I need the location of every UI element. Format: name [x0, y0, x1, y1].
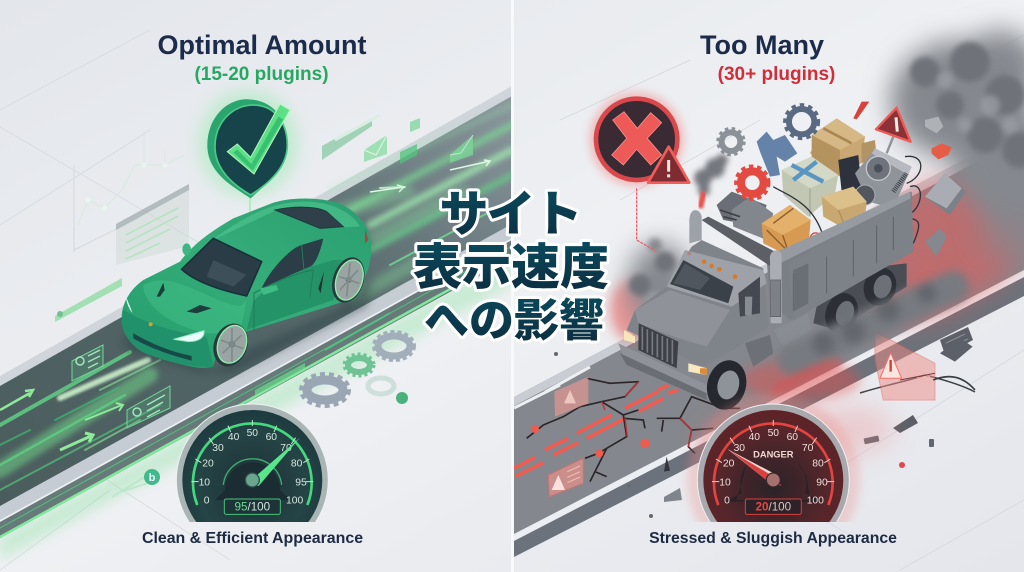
- x badge: [589, 92, 689, 251]
- green speedometer: 60: [266, 432, 277, 443]
- red speedometer: 60: [787, 432, 798, 443]
- green speedometer: 70: [280, 443, 292, 454]
- red speedometer: 20: [723, 459, 735, 470]
- truck: [618, 102, 975, 414]
- red speedometer: 70: [802, 443, 814, 454]
- front wheel: [706, 360, 746, 410]
- red speedometer: [687, 393, 860, 567]
- gears: [301, 332, 414, 406]
- caption: clean and efficient: Clean & Efficient Appearance: [142, 530, 363, 547]
- warning window: [875, 332, 935, 400]
- exhaust ember: [700, 192, 704, 208]
- center divider: [511, 0, 514, 572]
- center title: への影響: [424, 295, 604, 346]
- cracks: [527, 378, 740, 482]
- road: fast lane: [0, 86, 512, 560]
- exhaust smoke: [694, 154, 728, 196]
- green speedometer: 0: [204, 495, 210, 506]
- scattered debris: [554, 327, 975, 518]
- green speedometer: 50: [247, 428, 258, 439]
- red speedometer: 100: [807, 495, 824, 506]
- low smoke trail: [793, 283, 953, 360]
- road panels: [72, 345, 170, 428]
- red speedometer: 10: [719, 477, 731, 488]
- floating interface cards: [55, 115, 473, 322]
- green speedometer: 40: [228, 432, 240, 443]
- windows: [182, 238, 262, 296]
- red speedometer: 20/100: [755, 501, 792, 514]
- green gauge glow chip: [112, 469, 160, 497]
- red speedometer: 0: [724, 495, 730, 506]
- center title: 表示速度: [413, 241, 609, 295]
- wheels rear: [813, 263, 907, 338]
- warning sign: [876, 108, 911, 153]
- panel: too many: [514, 30, 1024, 570]
- gears and puzzle: [718, 105, 818, 199]
- title: optimal amount: Optimal Amount: [158, 30, 366, 60]
- cab: [618, 210, 782, 410]
- smoke clouds: [628, 30, 1024, 327]
- car body: [122, 199, 371, 368]
- green speedometer: [176, 404, 328, 522]
- red lane marks: [514, 385, 678, 477]
- warning plates: [554, 377, 588, 417]
- red speedometer: 50: [768, 428, 779, 439]
- subtitle: 15-20 plugins: (15-20 plugins): [194, 64, 329, 85]
- red speedometer: 30: [734, 443, 745, 454]
- green gauge glow chip: b: [149, 472, 156, 484]
- cargo: [716, 102, 966, 256]
- red speedometer: 90: [816, 477, 828, 488]
- arrows on road: [0, 160, 490, 450]
- wires: [773, 156, 922, 244]
- dump bed: [767, 192, 914, 320]
- center title: [413, 188, 609, 346]
- red speedometer: 80: [812, 459, 824, 470]
- green speedometer: 100: [286, 495, 304, 506]
- red speedometer: DANGER: [753, 450, 794, 460]
- center title: サイト: [439, 188, 581, 242]
- cracked road: [514, 128, 1024, 557]
- green speedometer: 95: [295, 477, 307, 488]
- red speedometer: 40: [749, 432, 760, 443]
- red glow: [610, 180, 1020, 470]
- green speedometer: 95/100: [234, 501, 271, 514]
- vents and lights: [157, 283, 165, 297]
- subtitle: 30+ plugins: (30+ plugins): [718, 64, 835, 85]
- title: too many: Too Many: [700, 30, 824, 60]
- green speedometer: 30: [212, 443, 224, 454]
- green speedometer: 10: [199, 477, 210, 488]
- wheels: [213, 324, 248, 366]
- panel: optimal amount: [0, 30, 512, 570]
- check pin: [198, 90, 298, 243]
- caption: stressed and sluggish: Stressed & Sluggish Appearance: [649, 530, 897, 547]
- car: [122, 190, 467, 373]
- green speedometer: 80: [291, 459, 303, 470]
- green speedometer: 20: [202, 459, 214, 470]
